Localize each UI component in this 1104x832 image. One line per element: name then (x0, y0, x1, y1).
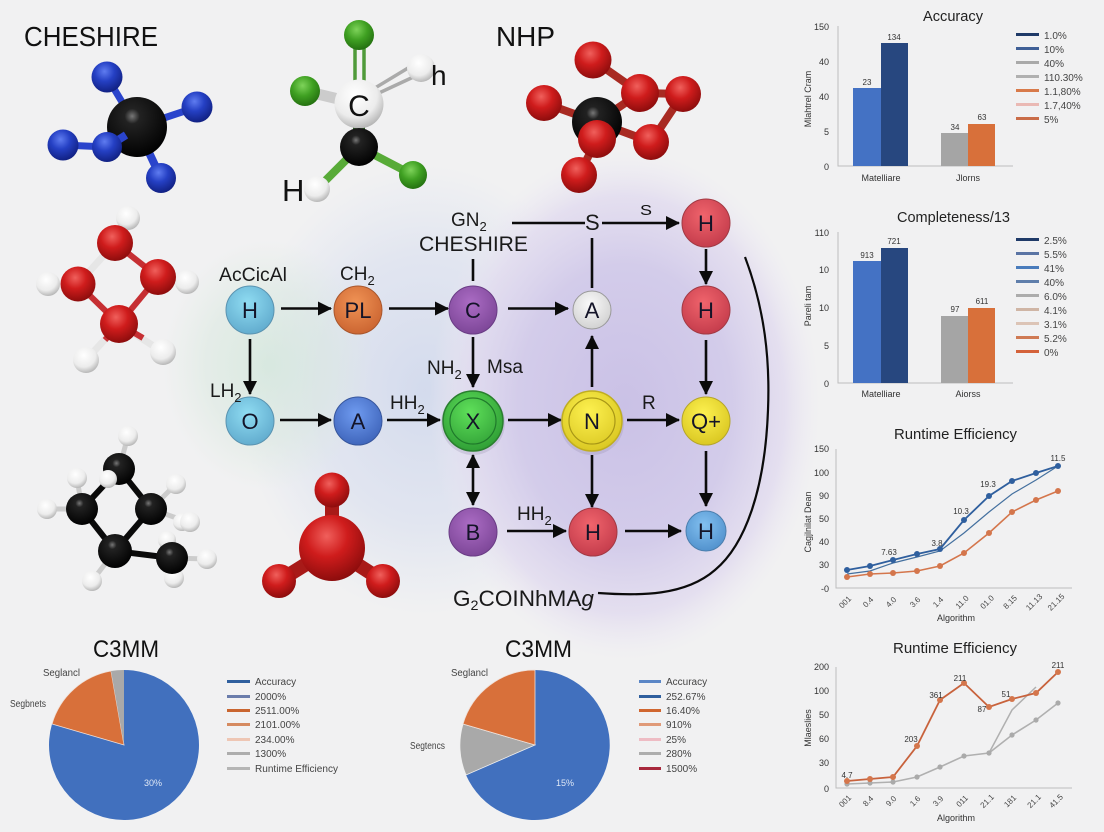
line chart: Runtime Efficiency upper: 11.5 (1051, 454, 1066, 463)
line chart: Runtime Efficiency upper: 3.8 (931, 539, 943, 548)
node H red bottom: H (585, 520, 601, 545)
legend: left pie (227, 677, 338, 775)
pie chart: right: C3MM (505, 636, 572, 663)
line chart: Runtime Efficiency upper: 7.63 (881, 548, 897, 557)
legend: Accuracy: 1.1,80% (1044, 87, 1081, 98)
node A blue (334, 397, 382, 445)
line chart: Runtime Efficiency lower: 211 (954, 674, 967, 683)
line chart: Runtime Efficiency lower: 361 (929, 691, 943, 700)
bar chart: Accuracy: 0 (824, 162, 829, 172)
node A white (573, 291, 611, 329)
node PL: PL (345, 298, 371, 323)
line chart: Runtime Efficiency lower: 181 (1002, 793, 1019, 809)
bar chart: Completeness: 5 (824, 341, 829, 351)
pie chart: right (410, 636, 707, 820)
node H red top: H (698, 211, 714, 236)
flow labels: COINhMA (479, 586, 582, 611)
legend: right pie: 1500% (666, 764, 697, 775)
line chart: Runtime Efficiency upper: 19.3 (980, 480, 996, 489)
bar chart: Completeness: 913 (860, 251, 874, 260)
line chart: Runtime Efficiency lower: Algorithm (937, 813, 975, 823)
line chart: Runtime Efficiency lower: 1.6 (908, 794, 923, 808)
bar chart: Accuracy (803, 8, 1083, 183)
flow labels: GN (451, 210, 480, 231)
bar chart: Accuracy: 23 (863, 78, 872, 87)
molecule: red ring (36, 206, 199, 373)
legend: Accuracy: 5% (1044, 115, 1059, 126)
pie chart: right: 15% (556, 778, 574, 788)
line chart: Runtime Efficiency upper: 1.4 (931, 595, 946, 609)
bar chart: Completeness: 721 (887, 237, 901, 246)
flow labels: HH (517, 504, 544, 525)
legend: Completeness: 5.5% (1044, 250, 1067, 261)
pie chart: left: 30% (144, 778, 162, 788)
bar chart: Accuracy: Jlorns (956, 173, 980, 183)
line chart: Runtime Efficiency upper: 150 (814, 444, 829, 454)
line chart: Runtime Efficiency lower: 21.1 (1026, 792, 1043, 810)
bar chart: Accuracy: 40 (819, 57, 829, 67)
legend: right pie: 252.67% (666, 692, 706, 703)
legend: left pie: 234.00% (255, 735, 295, 746)
flow labels: G (453, 586, 470, 611)
bar chart: Accuracy: 34 (951, 123, 960, 132)
legend: Accuracy: 110.30% (1044, 73, 1083, 84)
line chart: Runtime Efficiency lower: Runtime Efficiency (893, 640, 1017, 657)
line chart: Runtime Efficiency upper: 11.0 (954, 593, 971, 611)
molecule: red and black (526, 42, 701, 193)
line chart: Runtime Efficiency upper: 90 (819, 491, 829, 501)
legend: Completeness: 3.1% (1044, 320, 1067, 331)
molecule: black ring with hydrogens (37, 426, 217, 591)
title: NHP: NHP (496, 21, 555, 52)
flow labels: 2 (234, 390, 242, 405)
line chart: Runtime Efficiency upper: 01.0 (979, 593, 996, 611)
flow labels: g (581, 586, 595, 611)
molecule: blue and black (48, 62, 212, 193)
line chart: Runtime Efficiency lower: 4.7 (841, 771, 853, 780)
bar chart: Completeness: 10 (819, 303, 829, 313)
flow labels: 2 (454, 367, 462, 382)
line chart: Runtime Efficiency upper: 3.6 (908, 595, 923, 609)
legend: Accuracy: 1.7,40% (1044, 101, 1081, 112)
legend: Completeness: 4.1% (1044, 306, 1067, 317)
line chart: Runtime Efficiency upper: 21.15 (1046, 592, 1067, 612)
line chart: Runtime Efficiency lower: 87 (978, 705, 987, 714)
node H red top (682, 199, 730, 247)
node H cyan (226, 286, 274, 334)
node B: B (466, 520, 480, 545)
legend: left pie: 2101.00% (255, 720, 300, 731)
bar chart: Accuracy: 5 (824, 127, 829, 137)
bar chart: Accuracy: Accuracy (923, 8, 983, 25)
line chart: Runtime Efficiency lower: 9.0 (884, 794, 899, 808)
pie chart: left: Segbnets (10, 699, 46, 710)
legend: right pie: 16.40% (666, 706, 700, 717)
legend: Accuracy (1016, 31, 1083, 126)
line chart: Runtime Efficiency lower: 41.5 (1048, 792, 1065, 810)
legend: Completeness (1016, 236, 1067, 359)
node Q (682, 397, 730, 445)
node H blue (686, 511, 726, 551)
bar chart: Completeness: 97 (951, 305, 960, 314)
line chart: Runtime Efficiency upper (803, 426, 1072, 623)
molecule: green with carbon label: C (348, 90, 370, 123)
line chart: Runtime Efficiency lower: 60 (819, 734, 829, 744)
legend: Accuracy: 1.0% (1044, 31, 1067, 42)
line chart: Runtime Efficiency lower: 200 (814, 662, 829, 672)
molecule: large red (262, 472, 400, 598)
node O (226, 397, 274, 445)
pie chart: right: Segtencs (410, 741, 445, 752)
node A blue: A (351, 409, 366, 434)
legend: right pie (639, 677, 707, 775)
legend: Accuracy: 40% (1044, 59, 1064, 70)
legend: left pie: 2511.00% (255, 706, 299, 717)
bar chart: Completeness: 611 (976, 297, 989, 306)
flow labels: 2 (417, 402, 425, 417)
node X (441, 391, 505, 455)
bar chart: Completeness: Completeness/13 (897, 209, 1010, 226)
bar chart: Accuracy: 40 (819, 92, 829, 102)
line chart: Runtime Efficiency upper: Algorithm (937, 613, 975, 623)
flow diagram (210, 199, 768, 613)
pie chart: left: Seglancl (43, 668, 80, 679)
flow labels (210, 202, 656, 613)
flow connectors (250, 223, 768, 594)
flow labels: S (585, 210, 600, 235)
flow labels: LH (210, 381, 234, 402)
flow labels: Msa (487, 357, 523, 378)
bar chart: Accuracy: 150 (814, 22, 829, 32)
flow labels: 2 (367, 273, 375, 288)
line chart: Runtime Efficiency lower: 21.1 (979, 792, 996, 810)
line chart: Runtime Efficiency upper: Runtime Efficiency (894, 426, 1017, 443)
line chart: Runtime Efficiency upper: Cagjlnilat Dean (803, 491, 813, 553)
line chart: Runtime Efficiency upper: -0 (821, 584, 829, 594)
line chart: Runtime Efficiency upper: 11.13 (1024, 592, 1045, 612)
flow labels: 2 (480, 219, 487, 234)
line chart: Runtime Efficiency lower: 50 (819, 710, 829, 720)
node N: N (584, 409, 600, 434)
node H red bottom (569, 508, 617, 556)
line chart: Runtime Efficiency lower: 011 (955, 793, 970, 809)
bar chart: Completeness: Matelliare (861, 389, 901, 399)
flow labels: CH (340, 264, 367, 285)
node B (449, 508, 497, 556)
molecule: green with carbon label: H (282, 173, 304, 208)
flow labels: R (642, 393, 656, 414)
flow labels: 2 (471, 597, 479, 613)
legend: right pie: 280% (666, 749, 692, 760)
flow labels: NH (427, 358, 454, 379)
bar chart: Completeness: Pareli tam (803, 286, 813, 326)
line chart: Runtime Efficiency lower: 211 (1052, 661, 1065, 670)
bar chart: Completeness (803, 209, 1067, 399)
bar chart: Completeness: 110 (815, 228, 829, 238)
flow labels: S (640, 202, 652, 219)
legend: left pie: Runtime Efficiency (255, 764, 338, 775)
line chart: Runtime Efficiency lower: 0 (824, 784, 829, 794)
bar chart: Accuracy: Matelliare (861, 173, 901, 183)
molecule: green with carbon label: h (431, 60, 447, 91)
bar chart: Completeness: 0 (824, 379, 829, 389)
line chart: Runtime Efficiency upper: 50 (819, 514, 829, 524)
legend: left pie: Accuracy (255, 677, 296, 688)
title: CHESHIRE: CHESHIRE (24, 21, 158, 52)
node H red middle (682, 286, 730, 334)
bar chart: Accuracy: 134 (887, 33, 901, 42)
pie chart: right: Seglancl (451, 668, 488, 679)
bar chart: Accuracy: 63 (978, 113, 987, 122)
legend: left pie: 1300% (255, 749, 286, 760)
pie chart: left: C3MM (93, 636, 159, 663)
line chart: Runtime Efficiency lower: Mlaeslies (803, 709, 813, 747)
line chart: Runtime Efficiency lower: 30 (819, 758, 829, 768)
node H cyan: H (242, 298, 258, 323)
node H blue: H (698, 519, 714, 544)
line chart: Runtime Efficiency lower: 100 (814, 686, 829, 696)
legend: Completeness: 5.2% (1044, 334, 1067, 345)
node X: X (466, 409, 481, 434)
node A white: A (585, 298, 600, 323)
line chart: Runtime Efficiency lower: 001 (837, 793, 854, 809)
line chart: Runtime Efficiency upper: 001 (837, 594, 854, 610)
node PL (334, 286, 382, 334)
legend: Completeness: 41% (1044, 264, 1064, 275)
flow labels: 2 (544, 513, 552, 528)
legend: Completeness: 0% (1044, 348, 1059, 359)
line chart: Runtime Efficiency upper: 8.15 (1002, 593, 1019, 611)
pie chart: left (10, 636, 338, 820)
line chart: Runtime Efficiency upper: 100 (814, 468, 829, 478)
legend: Accuracy: 10% (1044, 45, 1064, 56)
node C: C (465, 298, 481, 323)
molecule: green with carbon label (282, 20, 447, 208)
legend: right pie: 25% (666, 735, 686, 746)
line chart: Runtime Efficiency lower: 8.4 (861, 794, 876, 808)
flow labels: AcCicAl (219, 265, 287, 286)
line chart: Runtime Efficiency upper: 0.4 (861, 595, 876, 609)
legend: Completeness: 6.0% (1044, 292, 1067, 303)
node N (560, 391, 624, 455)
line chart: Runtime Efficiency upper: 40 (819, 537, 829, 547)
line chart: Runtime Efficiency lower: 3.9 (931, 794, 946, 808)
line chart: Runtime Efficiency lower: 203 (904, 735, 918, 744)
legend: Completeness: 40% (1044, 278, 1064, 289)
flow labels: CHESHIRE (419, 233, 528, 256)
line chart: Runtime Efficiency upper: 30 (819, 560, 829, 570)
node H red middle: H (698, 298, 714, 323)
legend: Completeness: 2.5% (1044, 236, 1067, 247)
line chart: Runtime Efficiency upper: 10.3 (953, 507, 969, 516)
legend: left pie: 2000% (255, 692, 286, 703)
line chart: Runtime Efficiency lower (803, 640, 1072, 823)
flow labels: HH (390, 393, 417, 414)
bar chart: Completeness: 10 (819, 265, 829, 275)
line chart: Runtime Efficiency lower: 51 (1002, 690, 1011, 699)
node C (449, 286, 497, 334)
legend: right pie: Accuracy (666, 677, 707, 688)
line chart: Runtime Efficiency upper: 4.0 (884, 595, 899, 609)
legend: right pie: 910% (666, 720, 692, 731)
node O: O (241, 409, 259, 434)
bar chart: Completeness: Aiorss (955, 389, 981, 399)
bar chart: Accuracy: Mlahtrel Cram (803, 71, 813, 127)
node Q: Q+ (691, 409, 721, 434)
